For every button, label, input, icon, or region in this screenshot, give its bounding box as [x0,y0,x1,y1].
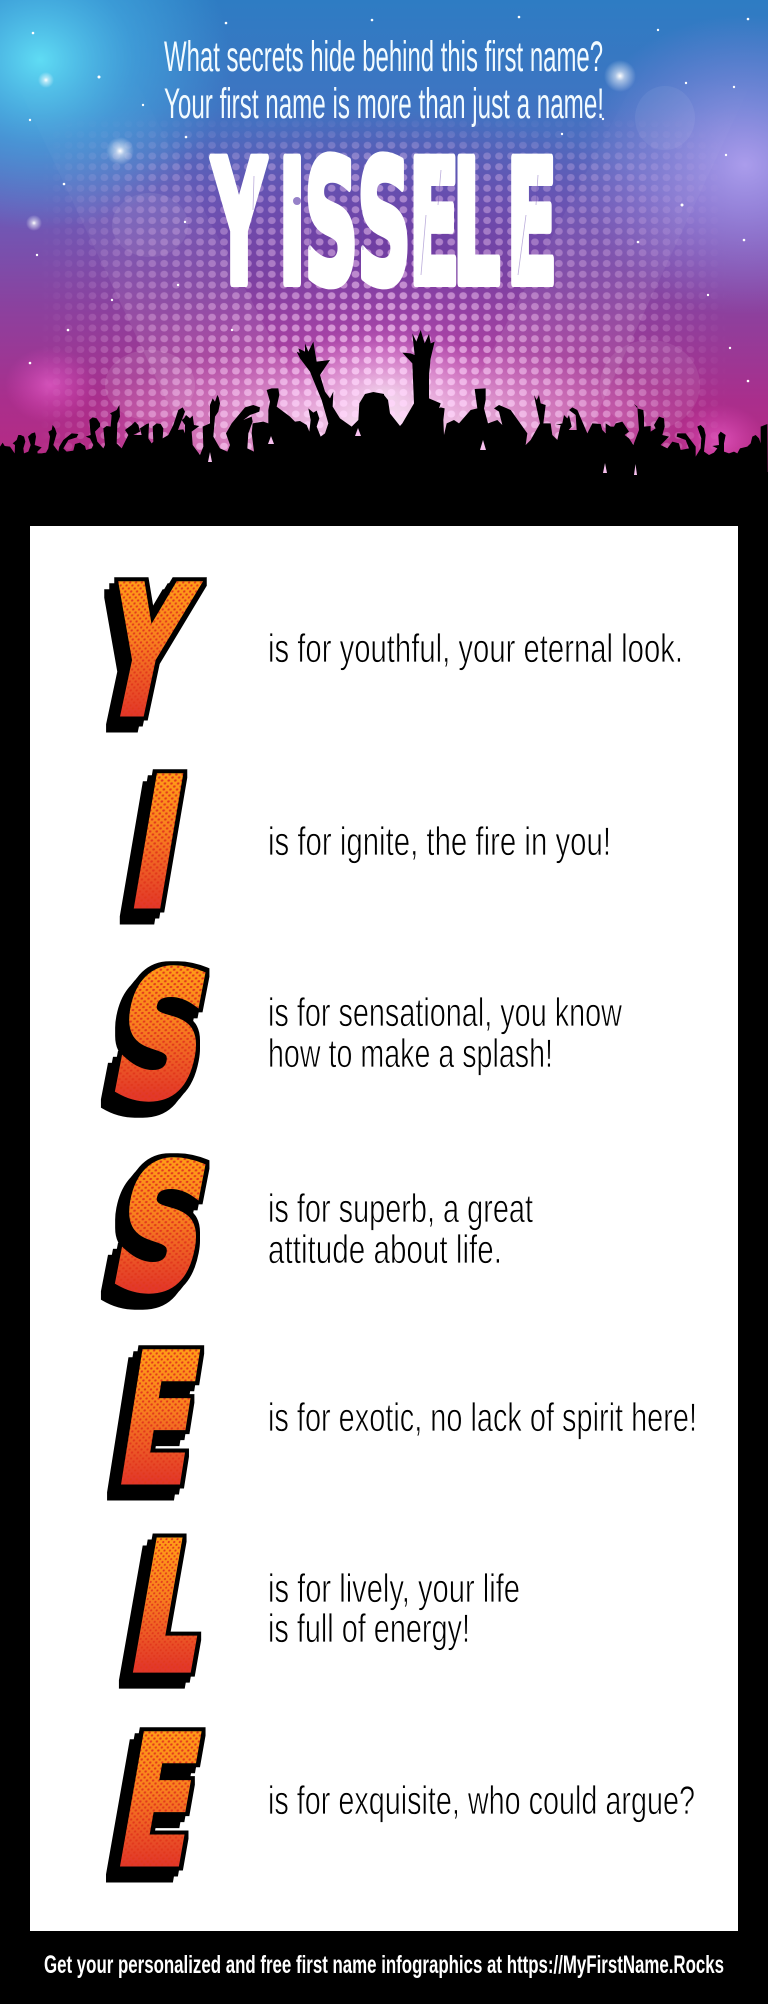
heading: intro lines [164,33,604,128]
comic letter Y: Y [85,550,206,755]
crowd silhouette [0,330,768,528]
comic letter E: E [106,1700,214,1905]
row E 2 [106,1700,695,1905]
text row L [268,1567,520,1651]
left half of crowd [0,342,384,500]
comic letter S: S [100,938,223,1135]
text row L: is full of energy! [268,1607,470,1651]
title: first name: YISSELE [211,125,558,324]
right half of crowd [384,330,768,500]
comic letter E: E [107,1318,212,1523]
crowd light gaps [208,428,637,475]
row E 1 [107,1318,697,1523]
comic letter S: S [100,1130,223,1327]
row L [122,1511,520,1706]
comic letter I: I [119,741,197,947]
text row S: is for superb, a great [268,1187,533,1231]
text row S: is for sensational, you know [268,991,622,1035]
row Y [85,550,683,755]
row I [119,741,611,947]
stars [26,16,749,382]
panel: letters and meanings [30,526,738,1931]
text row L: is for lively, your life [268,1567,520,1611]
text row S [268,991,622,1076]
header: concert background [0,0,768,510]
text row S: how to make a splash! [268,1032,553,1076]
comic letter L: L [122,1511,218,1706]
row S 2 [100,1130,533,1327]
row S 1 [100,938,622,1135]
text row I: is for ignite, the fire in you! [268,820,611,864]
text row S [268,1187,533,1272]
text row S: attitude about life. [268,1228,502,1272]
